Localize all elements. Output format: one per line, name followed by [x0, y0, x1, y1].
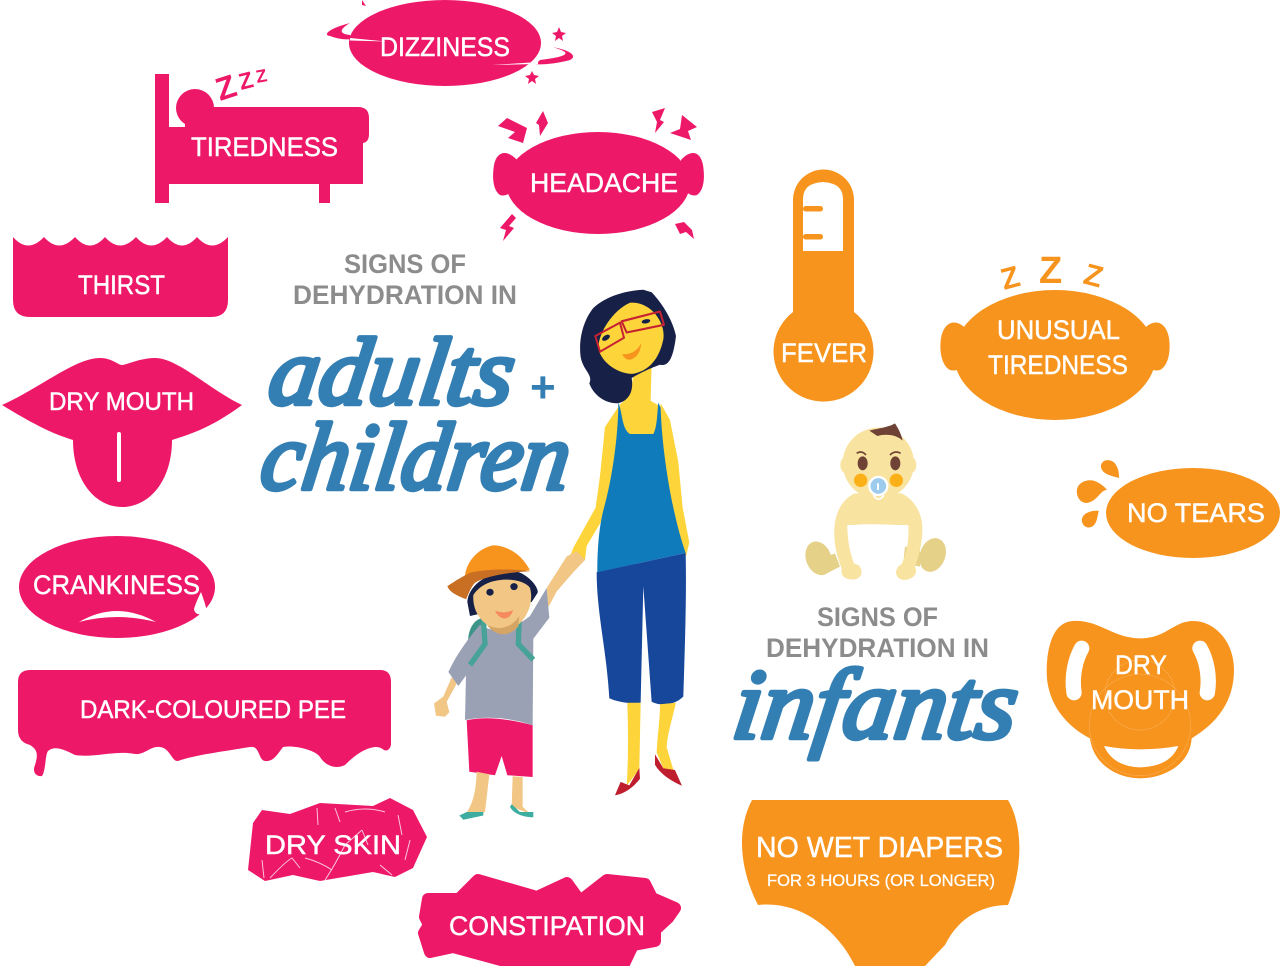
heading: signs of dehydration in adults and children: [255, 249, 578, 510]
mother top: [597, 402, 686, 572]
heading: signs of dehydration in infants: [727, 602, 1026, 760]
symptom: no tears: [1077, 460, 1280, 558]
symptom: constipation: [424, 880, 675, 966]
symptom: unusual tiredness: [940, 250, 1170, 420]
symptom: tiredness bed: Z: [236, 66, 256, 95]
child backpack straps: [470, 614, 533, 665]
symptom: no tears: NO TEARS: [1127, 498, 1265, 528]
baby head: [843, 428, 914, 499]
symptom: crankiness: [19, 536, 215, 638]
baby cheeks: [854, 474, 867, 487]
child face and hair: [467, 570, 538, 616]
baby hair: [869, 423, 903, 441]
mother face: [598, 303, 664, 374]
heading: signs of dehydration in adults and children: SIGNS OF: [344, 249, 466, 279]
symptom: dry mouth lips: DRY MOUTH: [49, 388, 194, 416]
symptom: no wet diapers: NO WET DIAPERS: [756, 832, 1003, 864]
symptom: unusual tiredness: Z: [1080, 258, 1106, 295]
heading: signs of dehydration in adults and children: adults: [263, 318, 522, 425]
symptom: headache: [493, 108, 704, 241]
symptom: tiredness bed: Z: [211, 67, 241, 108]
mother legs: [627, 703, 641, 786]
child shirt: [448, 588, 549, 725]
symptom: tiredness bed: Z: [254, 65, 269, 87]
mother glasses: [595, 312, 664, 352]
symptom: no wet diapers: FOR 3 HOURS (OR LONGER): [767, 871, 995, 890]
symptom: dizziness: DIZZINESS: [380, 32, 510, 62]
symptom: dark-coloured pee: DARK-COLOURED PEE: [80, 696, 346, 724]
baby pacifier: [869, 477, 887, 495]
symptom: dry mouth lips: [2, 358, 242, 507]
symptom: unusual tiredness: TIREDNESS: [988, 350, 1128, 380]
heading: signs of dehydration in adults and children: children: [255, 403, 578, 510]
baby feet: [801, 534, 950, 579]
symptom: thirst: THIRST: [78, 270, 165, 300]
symptom: dry skin: DRY SKIN: [265, 830, 401, 860]
mother hair: [580, 290, 676, 403]
symptom: dark-coloured pee: [18, 670, 391, 776]
symptom: dry mouth pacifier: DRY: [1115, 650, 1167, 680]
child arms: [547, 551, 585, 607]
symptom: thirst: [13, 237, 228, 317]
heading: signs of dehydration in infants: SIGNS OF: [817, 602, 938, 632]
heading: signs of dehydration in adults and children: +: [530, 363, 556, 412]
child backpack: [466, 618, 485, 686]
mother shoes: [615, 768, 640, 795]
child legs: [463, 772, 489, 817]
baby eyes: [858, 456, 868, 470]
symptom: no wet diapers: [742, 800, 1019, 966]
symptom: unusual tiredness: Z: [997, 260, 1024, 297]
symptom: headache: HEADACHE: [530, 168, 678, 198]
icon: lightning bolts: [498, 108, 697, 241]
heading: signs of dehydration in adults and children: DEHYDRATION IN: [293, 280, 517, 310]
symptom: tiredness bed: [155, 65, 369, 203]
heading: signs of dehydration in infants: DEHYDRATION IN: [766, 633, 989, 663]
symptom: fever thermometer: [774, 170, 874, 402]
icon: tear drops: [1101, 460, 1119, 478]
symptom: unusual tiredness: UNUSUAL: [997, 315, 1120, 345]
symptom: fever thermometer: FEVER: [781, 338, 867, 368]
heading: signs of dehydration in infants: infants: [727, 648, 1026, 760]
symptom: dry mouth pacifier: MOUTH: [1091, 685, 1189, 715]
symptom: tiredness bed: TIREDNESS: [191, 132, 338, 162]
symptom: dizziness: [327, 0, 573, 86]
mother neck, chest and arms: [570, 364, 689, 564]
symptom: dry mouth pacifier: [1047, 621, 1234, 778]
symptom: crankiness: CRANKINESS: [33, 570, 200, 600]
symptom: unusual tiredness: Z: [1039, 250, 1062, 292]
illustration: child: [434, 545, 585, 820]
baby body and arms: [834, 493, 922, 580]
mother trousers: [597, 553, 686, 705]
illustration: baby: [801, 423, 950, 580]
child shorts: [467, 718, 533, 777]
symptom: dry skin: [248, 798, 427, 881]
symptom: constipation: CONSTIPATION: [449, 911, 645, 941]
child hat: [465, 545, 530, 576]
illustration: mother: [570, 290, 689, 795]
